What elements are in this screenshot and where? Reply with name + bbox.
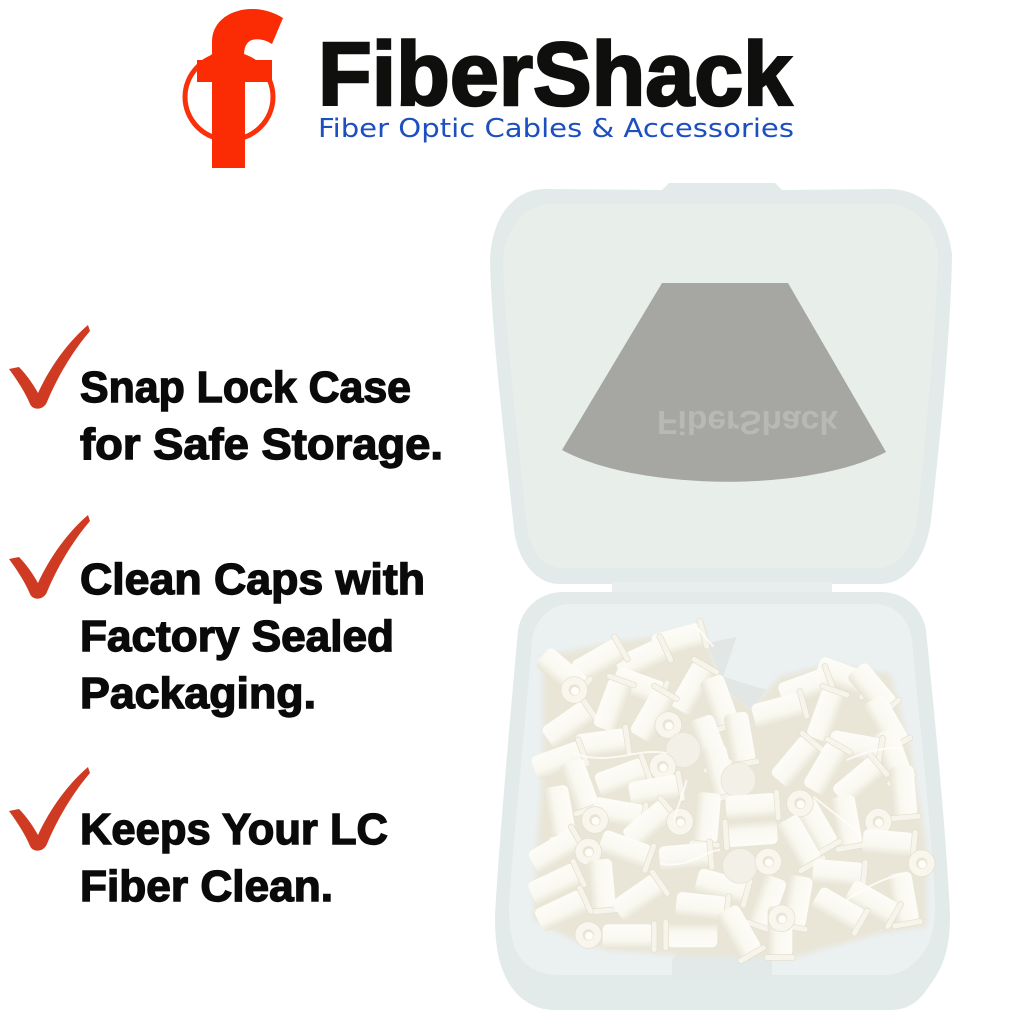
front latch (672, 950, 772, 978)
feature text: Keeps Your LC (80, 805, 388, 854)
product photo: open case (490, 183, 952, 1010)
logo tagline: Fiber Optic Cables & Accessories (318, 114, 794, 144)
logo: FiberShack f mark (185, 9, 283, 168)
icon: check mark (9, 325, 90, 409)
feature text: Packaging. (80, 669, 316, 718)
hinge (612, 582, 832, 596)
icon: check mark (9, 515, 90, 599)
feature text: Fiber Clean. (80, 862, 333, 911)
feature text: Factory Sealed (80, 612, 394, 661)
feature text: Clean Caps with (80, 555, 425, 604)
logo wordmark: FiberShack: FiberShack (318, 25, 793, 125)
feature text: for Safe Storage. (80, 420, 443, 469)
LC dust caps in bag (525, 618, 935, 965)
case base (495, 592, 950, 1010)
feature text (80, 363, 443, 469)
feature text (80, 805, 388, 911)
feature text (80, 555, 425, 718)
icon: check mark (9, 767, 90, 851)
feature text: Snap Lock Case (80, 363, 411, 412)
feature: keeps fiber clean (9, 767, 388, 911)
feature: snap lock case (9, 325, 443, 469)
case lid (490, 183, 952, 584)
lid logo sticker (562, 283, 886, 482)
mirrored logo on sticker: FiberShack (657, 404, 839, 441)
feature: clean caps (9, 515, 425, 718)
